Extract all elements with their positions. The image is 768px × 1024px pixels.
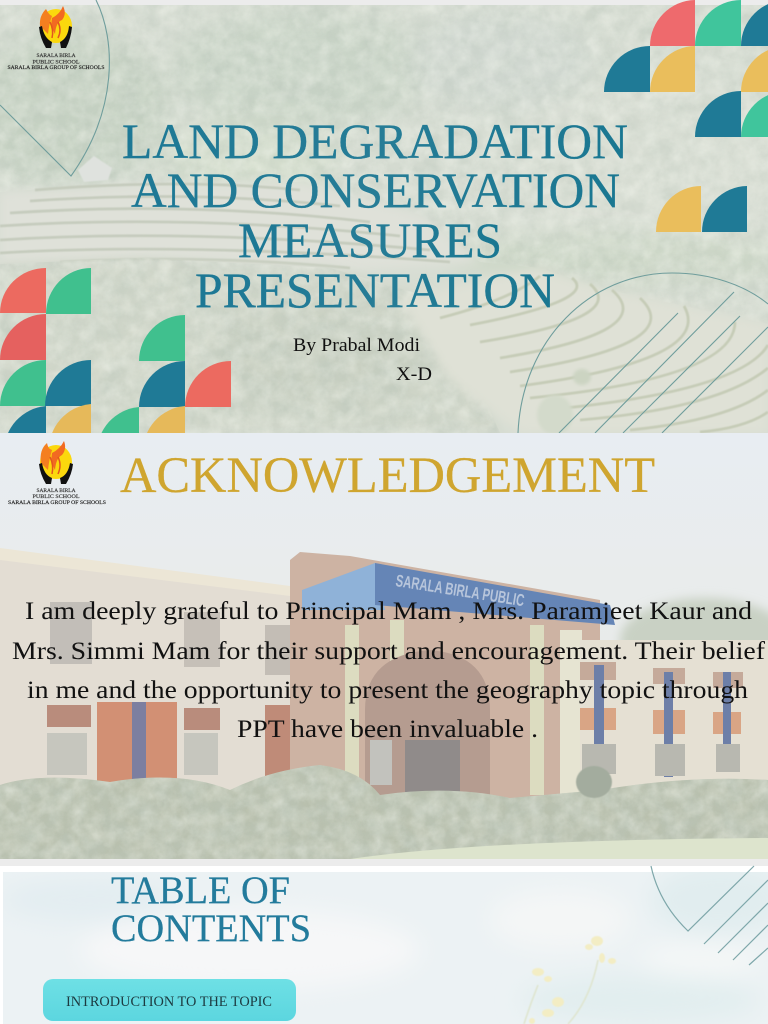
flowers bbox=[524, 936, 616, 1024]
left terraces bbox=[0, 182, 480, 272]
trees bbox=[616, 594, 768, 640]
author byline: By Prabal Modi bbox=[293, 336, 420, 356]
right wing bbox=[580, 640, 768, 800]
heading: table of contents: CONTENTS bbox=[111, 907, 311, 950]
panel: acknowledgement slide bbox=[0, 433, 768, 859]
left wing bbox=[0, 548, 295, 800]
acknowledgement text block bbox=[12, 598, 766, 743]
logo: school crest bbox=[8, 6, 104, 71]
title bbox=[122, 113, 628, 318]
author byline bbox=[293, 336, 432, 385]
title: LAND DEGRADATION bbox=[122, 113, 628, 169]
bushes and lawn bbox=[0, 765, 768, 859]
button: introduction to the topic: INTRODUCTION TO THE TOPIC bbox=[66, 994, 272, 1010]
background photo: forested terraced hillside bbox=[0, 5, 768, 435]
logo: school crest: PUBLIC SCHOOL bbox=[32, 494, 80, 500]
logo: school crest bbox=[8, 441, 106, 506]
heading: acknowledgement: ACKNOWLEDGEMENT bbox=[120, 448, 655, 504]
panel: table of contents slide bbox=[0, 865, 768, 1024]
decorative outline: leaf and diagonal lines bbox=[651, 866, 768, 965]
logo: school crest: SARALA BIRLA GROUP OF SCHOOLS bbox=[8, 500, 106, 506]
heading: table of contents bbox=[111, 869, 311, 950]
title: AND CONSERVATION bbox=[131, 162, 620, 218]
acknowledgement text block: Mrs. Simmi Mam for their support and encouragement. Their belief bbox=[12, 638, 766, 665]
logo: school crest: SARALA BIRLA bbox=[36, 53, 76, 59]
title: PRESENTATION bbox=[195, 262, 555, 318]
title: MEASURES bbox=[238, 212, 502, 268]
page gap bbox=[0, 866, 768, 1024]
button: introduction to the topic bbox=[43, 979, 296, 1021]
logo: school crest: PUBLIC SCHOOL bbox=[32, 60, 80, 66]
heading: table of contents: TABLE OF bbox=[111, 869, 290, 912]
geometric tiles: bottom left bbox=[0, 268, 231, 433]
geometric tiles: top right bbox=[604, 0, 768, 137]
acknowledgement text block: in me and the opportunity to present the geography topic through bbox=[27, 677, 749, 704]
decorative outline: circle with diagonal lines bbox=[518, 273, 768, 433]
geometric tiles: right pair bbox=[656, 186, 747, 232]
author byline: X-D bbox=[396, 365, 432, 385]
central block bbox=[290, 552, 615, 805]
logo: school crest: SARALA BIRLA GROUP OF SCHOOLS bbox=[8, 65, 104, 71]
background photo: sky with clouds and flowers bbox=[0, 865, 768, 1024]
background photo: school building bbox=[0, 433, 768, 859]
acknowledgement text block: I am deeply grateful to Principal Mam , Mrs. Paramjeet Kaur and bbox=[25, 598, 753, 625]
right terraces bbox=[400, 268, 768, 435]
acknowledgement text block: PPT have been invaluable . bbox=[237, 716, 538, 743]
decorative outline: leaf top-left bbox=[0, 0, 109, 176]
lower forest bbox=[0, 258, 500, 433]
logo: school crest: SARALA BIRLA bbox=[36, 488, 76, 494]
hut bbox=[78, 156, 112, 182]
photo signage: SARALA BIRLA PUBLIC bbox=[394, 571, 526, 610]
panel: title slide bbox=[0, 0, 768, 453]
